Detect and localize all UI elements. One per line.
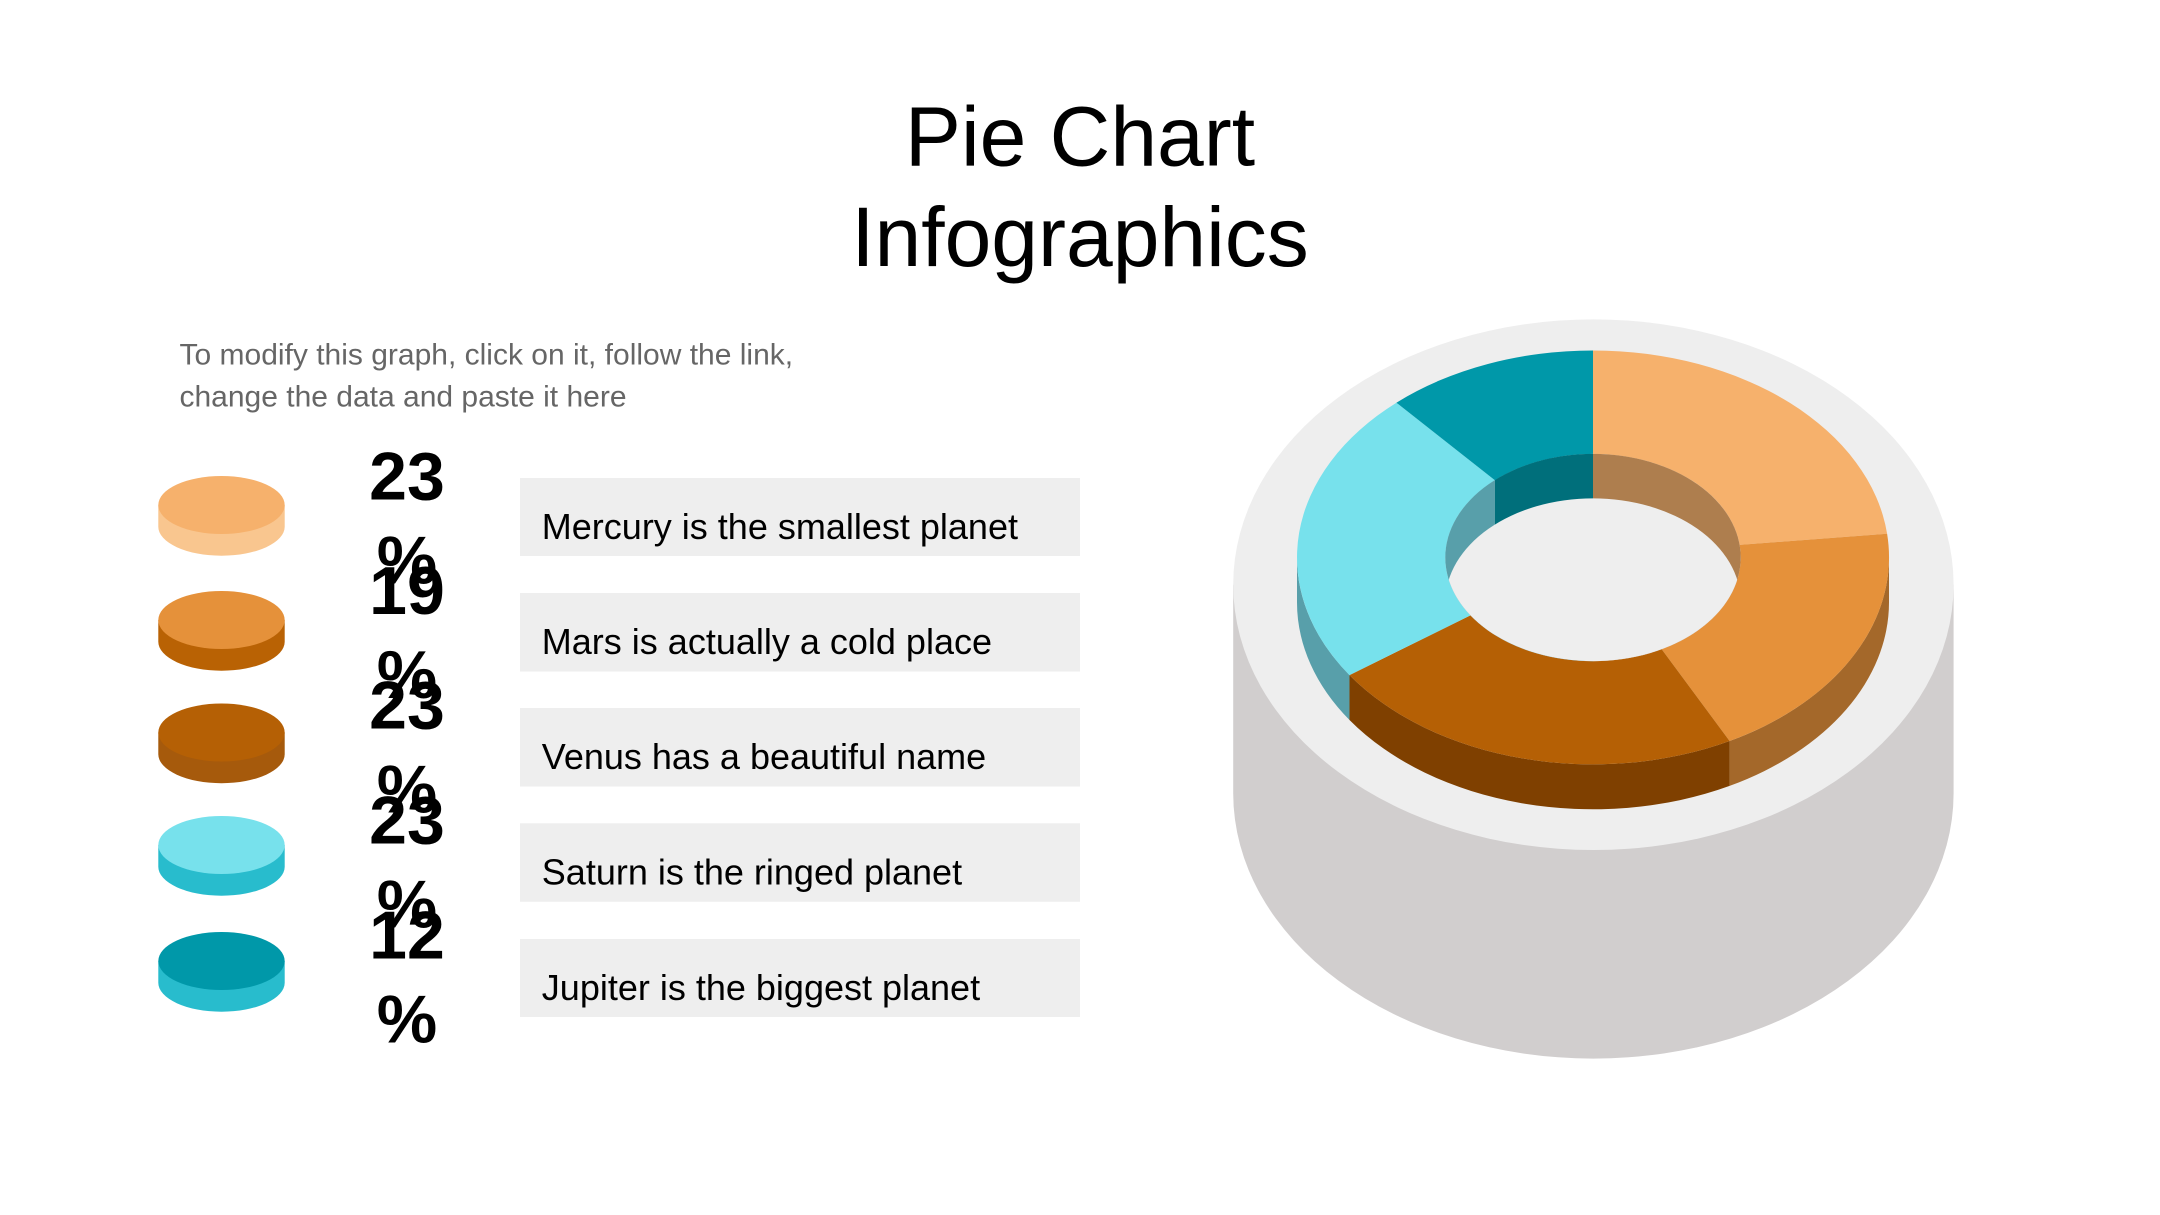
legend row: Venus xyxy=(158,668,1080,828)
outer wall: Saturn xyxy=(1297,558,1350,720)
donut hole inner walls and floor xyxy=(1445,454,1741,662)
value: Jupiter: 12 xyxy=(369,897,445,973)
puck icon: Saturn xyxy=(158,816,285,896)
legend row: Saturn xyxy=(158,782,1080,942)
label: Jupiter xyxy=(520,939,1080,1017)
value: Saturn: % xyxy=(377,866,437,942)
value: Venus xyxy=(369,668,445,828)
label: Mercury: Mercury is the smallest planet xyxy=(542,506,1018,547)
legend row: Jupiter xyxy=(158,897,1080,1057)
value: Venus: % xyxy=(377,752,437,828)
value: Mars xyxy=(369,553,445,713)
slice: Mercury 23% xyxy=(1593,350,1887,545)
platform cylinder xyxy=(1233,319,1954,1059)
value: Mars: % xyxy=(377,637,437,713)
outer wall: Venus xyxy=(1350,675,1730,809)
slice: Mars 19% xyxy=(1662,534,1889,741)
value: Saturn: 23 xyxy=(369,782,445,858)
value: Jupiter xyxy=(369,897,445,1057)
puck icon: Venus xyxy=(158,704,285,783)
value: Venus: 23 xyxy=(369,668,445,744)
legend row: Mercury xyxy=(158,438,1080,598)
label: Mercury xyxy=(520,478,1080,556)
subtitle text block: change the data and paste it here xyxy=(180,380,627,414)
subtitle text block: To modify this graph, click on it, follow the link, xyxy=(180,339,793,372)
label: Mars: Mars is actually a cold place xyxy=(542,621,992,662)
slice: Jupiter 12% xyxy=(1396,350,1593,480)
value: Mars: 19 xyxy=(369,553,445,629)
title: Pie Chart xyxy=(905,90,1255,184)
subtitle text block xyxy=(180,339,793,414)
label: Venus: Venus has a beautiful name xyxy=(542,736,986,777)
title xyxy=(851,90,1309,284)
label: Mars xyxy=(520,593,1080,672)
puck icon: Jupiter xyxy=(158,932,285,1012)
label: Saturn: Saturn is the ringed planet xyxy=(542,851,962,892)
puck icon: Mars xyxy=(158,591,285,671)
title: Infographics xyxy=(851,190,1309,284)
value: Mercury xyxy=(369,438,445,598)
slice: Venus 23% xyxy=(1350,615,1730,764)
slice: Saturn 23% xyxy=(1297,403,1495,675)
label: Jupiter: Jupiter is the biggest planet xyxy=(542,967,980,1008)
3D donut chart xyxy=(1233,319,1954,1059)
outer wall: Mars xyxy=(1730,558,1889,786)
value: Jupiter: % xyxy=(377,981,437,1057)
value: Mercury: 23 xyxy=(369,438,445,514)
value: Saturn xyxy=(369,782,445,942)
label: Venus xyxy=(520,708,1080,786)
puck icon: Mercury xyxy=(158,476,285,556)
label: Saturn xyxy=(520,823,1080,902)
legend row: Mars xyxy=(158,553,1080,713)
value: Mercury: % xyxy=(377,522,437,598)
